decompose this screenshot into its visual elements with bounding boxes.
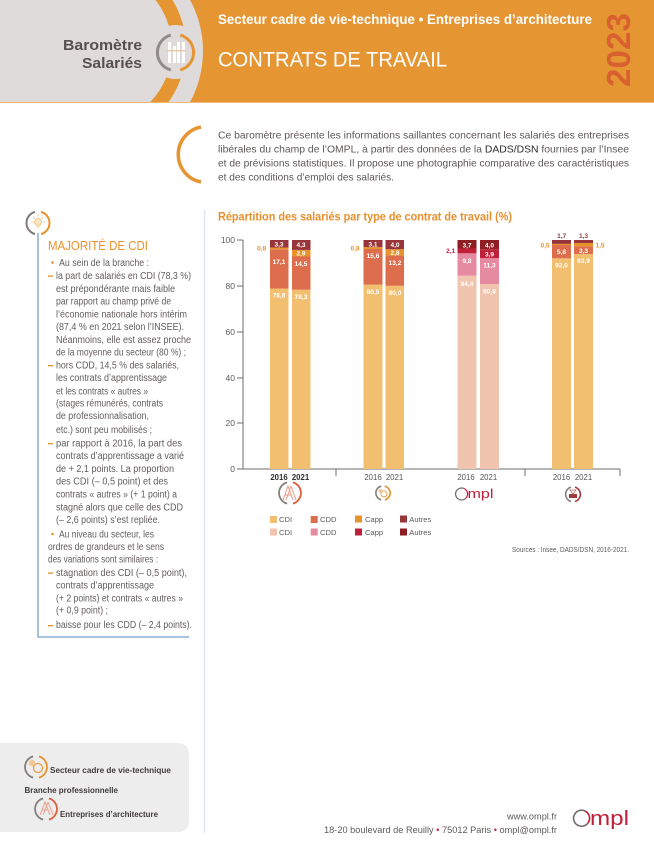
panel body text: baisse pour les CDD (– 2,4 points). (56, 620, 192, 631)
legend: CDI (279, 528, 292, 537)
x axis year labels: 2021 (480, 473, 497, 482)
x axis year labels: 2021 (575, 473, 592, 482)
barometer title (63, 37, 142, 72)
panel body text: les contrats d’apprentissage (56, 373, 167, 384)
bars: OMPL: 80,8 (483, 288, 496, 296)
bars: ensemble économie: 1,7 (557, 233, 567, 240)
panel: branche professionnelle (0, 743, 189, 832)
bars: OMPL: 9,8 (462, 258, 472, 265)
bars: OMPL: 4,0 (485, 242, 494, 250)
panel body text: de professionnalisation, (56, 411, 149, 422)
bars: entreprises d'architecture (257, 240, 310, 469)
bars: secteur cadre de vie-technique: 4,0 (390, 242, 400, 249)
footer contact: 18-20 boulevard de Reuilly • 75012 Paris • ompl@ompl.fr (324, 825, 557, 836)
y axis: 40 (226, 373, 235, 383)
logo: OMPL: mpl (468, 486, 494, 501)
panel body text: Néanmoins, elle est assez proche (56, 335, 191, 346)
panel body text: contrats « autres » (+ 1 point) a (56, 489, 177, 500)
chart title: Répartition des salariés par type de contrat de travail (%) (218, 210, 512, 224)
panel body text: stagnation des CDI (– 0,5 point), (56, 568, 187, 579)
bars: ensemble économie: 1,5 (595, 242, 605, 250)
barometer title: Baromètre (63, 37, 142, 54)
bars: entreprises d'architecture: 14,5 (295, 261, 308, 268)
x axis year labels: 2016 (457, 473, 475, 482)
panel body text: (87,4 % en 2021 selon l’INSEE). (56, 322, 184, 333)
panel: majorité de CDI (27, 212, 192, 637)
intro text: et des conditions d’emploi des salariés. (218, 172, 394, 184)
legend: Capp (365, 528, 383, 537)
logo: OMPL (456, 486, 494, 501)
bars: secteur cadre de vie-technique: 80,5 (367, 289, 380, 296)
panel body text: Au niveau du secteur, les (59, 529, 154, 540)
text: entreprises: Entreprises d’architecture (60, 809, 158, 819)
panel body text: l’économie nationale hors intérim (56, 309, 187, 320)
x axis year labels: 2016 (553, 473, 570, 482)
bars: entreprises d'architecture: 2,9 (296, 250, 306, 258)
bars: ensemble économie: 3,3 (579, 248, 588, 255)
sources: Sources : Insee, DADS/DSN, 2016-2021. (512, 545, 629, 554)
bars: entreprises d'architecture: 4,3 (296, 242, 306, 249)
panel body text: (– 2,6 points) s’est repliée. (56, 515, 160, 526)
legend: CDD (320, 515, 337, 524)
logo: OMPL footer (574, 808, 629, 830)
bars: OMPL: 3,7 (462, 242, 472, 250)
y axis: 0 (230, 464, 235, 474)
x axis year labels: 2021 (292, 473, 310, 482)
bars: entreprises d'architecture: 17,1 (273, 259, 286, 266)
bars: secteur cadre de vie-technique (350, 240, 404, 469)
panel body text: contrats d’apprentissage a varié (56, 451, 184, 462)
icon: lightbulb (27, 212, 49, 234)
panel body text: hors CDD, 14,5 % des salariés, (56, 361, 179, 372)
panel body text: des variations sont similaires : (48, 555, 158, 566)
panel body text: de + 2,1 points. La proportion (56, 464, 174, 475)
y axis (221, 235, 620, 476)
icon: ensemble (566, 487, 580, 502)
panel body text: etc.) sont peu mobilisés ; (56, 425, 152, 436)
sector heading: Secteur cadre de vie-technique • Entreprises d’architecture (218, 12, 592, 27)
panel body text: par rapport au champ privé de (56, 297, 171, 308)
panel body text: de la moyenne du secteur (80 %) ; (56, 348, 186, 359)
legend: CDD (320, 528, 337, 537)
year: 2023 (600, 13, 637, 87)
bars: ensemble économie: 5,8 (557, 249, 566, 256)
intro text (218, 130, 629, 184)
panel body text: des CDI (– 0,5 point) et des (56, 477, 168, 488)
bars: OMPL: 3,9 (485, 252, 494, 258)
intro text: et de prévisions statistiques. Il propose une photographie comparative des caractéristiques (218, 158, 629, 170)
legend: Autres (409, 515, 431, 524)
intro bracket (178, 127, 201, 182)
bars: entreprises d'architecture: 78,8 (273, 292, 286, 300)
bars: secteur cadre de vie-technique: 13,2 (389, 260, 402, 267)
x axis year labels: 2021 (386, 473, 403, 482)
icon: architecture (35, 798, 57, 820)
panel body text: stagné alors que celle des CDD (56, 502, 183, 513)
legend: CDI (279, 515, 292, 524)
panel body text: contrats d’apprentissage (56, 581, 154, 592)
logo: OMPL footer: mpl (590, 808, 629, 830)
bars: secteur cadre de vie-technique: 2,8 (390, 250, 400, 257)
bars: ensemble économie: 93,9 (577, 258, 590, 265)
bars: entreprises d'architecture: 78,3 (295, 294, 308, 301)
vertical separator (204, 210, 206, 833)
barometer title: Salariés (82, 55, 142, 72)
bars: OMPL: 84,4 (461, 281, 474, 288)
footer contact: www.ompl.fr (506, 812, 557, 822)
panel body text: par rapport à 2016, la part des (56, 438, 182, 449)
panel body text: (stages rémunérés, contrats (56, 398, 163, 409)
legend: Capp (365, 515, 383, 524)
bars: ensemble économie (540, 233, 605, 469)
bars: OMPL: 2,1 (446, 248, 456, 255)
panel body text: (+ 2 points) et contrats « autres » (56, 593, 183, 604)
panel body text: la part de salariés en CDI (78,3 %) (56, 271, 191, 282)
header band (0, 0, 654, 103)
icon: barometer (157, 35, 194, 70)
bars: entreprises d'architecture: 3,3 (274, 242, 284, 248)
bars: OMPL: 11,3 (483, 262, 496, 270)
x axis year labels: 2016 (270, 473, 288, 482)
bars: secteur cadre de vie-technique: 0,8 (350, 246, 360, 252)
text: branche: Branche professionnelle (24, 785, 118, 795)
footer contact (324, 812, 557, 836)
y axis: 20 (226, 418, 235, 428)
icon: secteur cadre de vie (376, 486, 390, 500)
panel heading: MAJORITÉ DE CDI (48, 238, 148, 253)
bars: secteur cadre de vie-technique: 15,6 (367, 253, 380, 260)
page title: CONTRATS DE TRAVAIL (218, 48, 447, 72)
stacked bar chart (221, 233, 620, 482)
bars: secteur cadre de vie-technique: 80,0 (389, 290, 402, 297)
bars: ensemble économie: 92,0 (555, 262, 568, 270)
panel body text: Au sein de la branche : (59, 258, 149, 269)
legend (270, 515, 431, 537)
intro text: Ce baromètre présente les informations saillantes concernant les salariés des entreprises (218, 130, 629, 142)
bars: ensemble économie: 1,3 (579, 233, 588, 240)
bars: OMPL (446, 240, 499, 469)
panel body text: et les contrats « autres » (56, 386, 148, 397)
text: secteur: Secteur cadre de vie-technique (50, 765, 171, 775)
icon: secteur (25, 756, 47, 778)
bars: entreprises d'architecture: 0,8 (257, 246, 267, 252)
y axis: 100 (221, 235, 235, 245)
intro text: libérales du champ de l’OMPL, à partir des données de la DADS/DSN fournies par l’Insee (218, 144, 629, 156)
y axis: 80 (226, 281, 235, 291)
panel body text: (+ 0,9 point) ; (56, 606, 108, 617)
bars: secteur cadre de vie-technique: 3,1 (368, 242, 378, 248)
panel body text (48, 258, 192, 631)
icon: architecture (279, 482, 301, 504)
orange list markers (48, 261, 54, 626)
bars: ensemble économie: 0,5 (540, 242, 550, 250)
panel body text: ordres de grandeurs et le sens (48, 542, 164, 553)
x axis year labels: 2016 (364, 473, 382, 482)
legend: Autres (409, 528, 431, 537)
x axis year labels (270, 473, 592, 482)
y axis: 60 (226, 327, 235, 337)
panel body text: est prépondérante mais faible (56, 284, 175, 295)
